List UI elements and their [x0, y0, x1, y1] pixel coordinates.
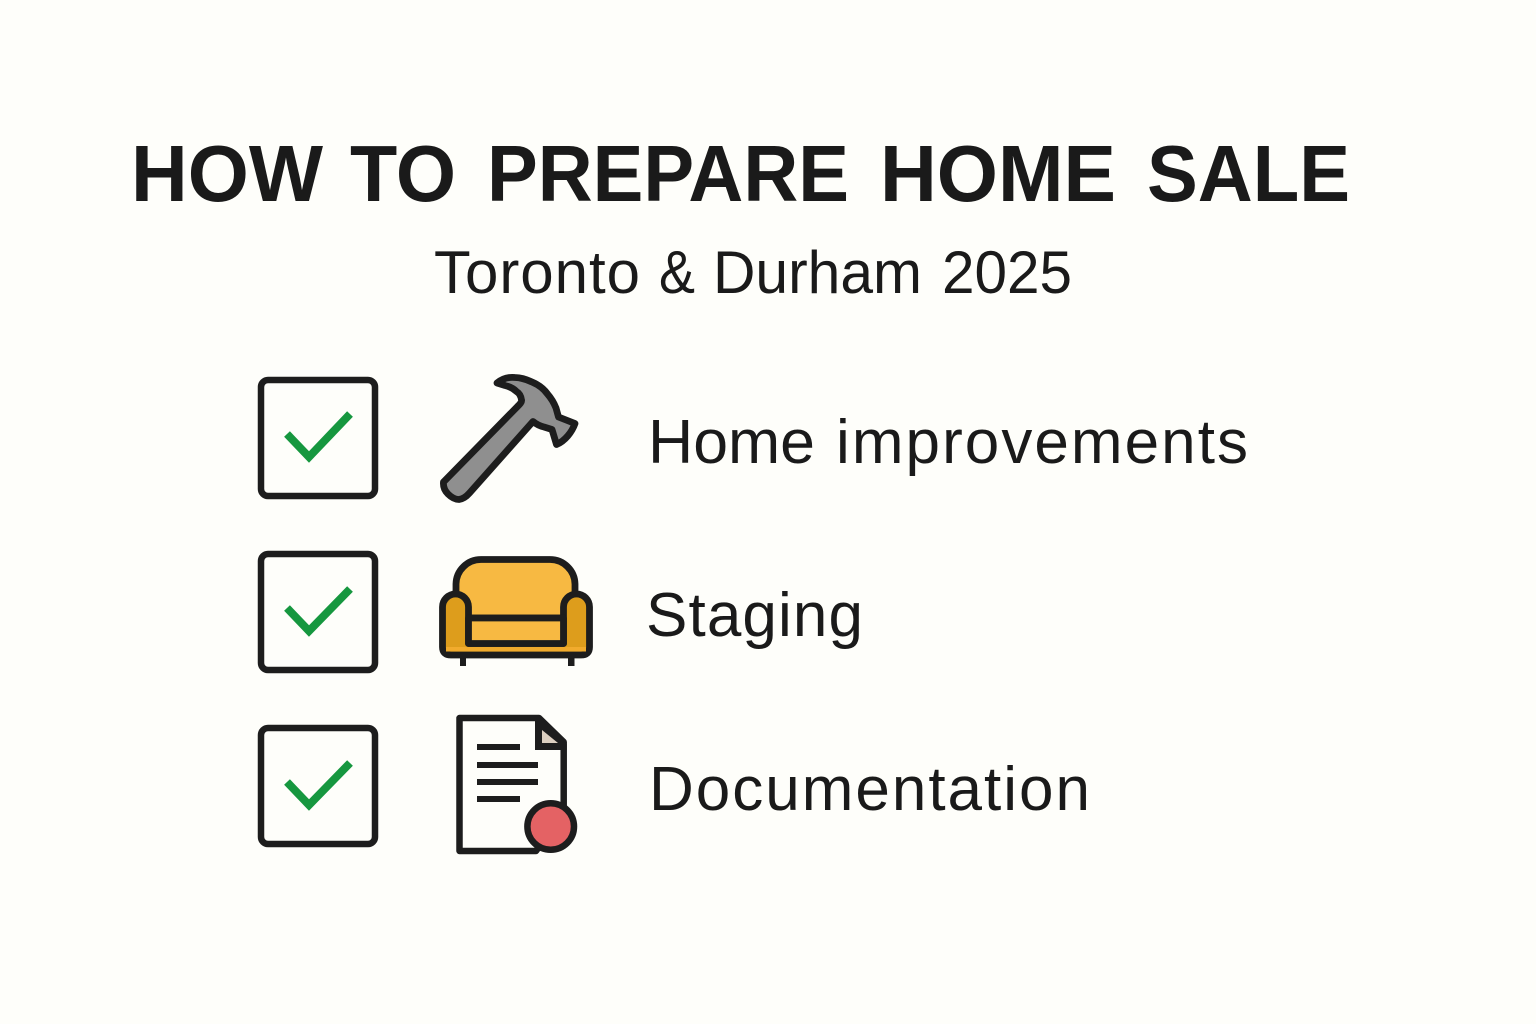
row: home improvements [261, 377, 1248, 500]
label: staging: Staging [646, 581, 863, 650]
icon: hammer [443, 377, 575, 500]
title: HOW [131, 129, 323, 218]
label: home improvements [648, 408, 1248, 477]
title: PREPARE [487, 129, 849, 218]
checkbox 2 [261, 554, 375, 670]
checkbox 1 [261, 380, 375, 496]
title: HOME [880, 129, 1116, 218]
subtitle: 2025 [942, 239, 1072, 306]
title [131, 129, 1350, 218]
title: TO [350, 129, 456, 218]
title: SALE [1147, 129, 1350, 218]
subtitle: Toronto [434, 239, 640, 306]
row: documentation [261, 716, 1090, 851]
subtitle [434, 239, 1072, 306]
subtitle: Durham [713, 239, 922, 306]
row: staging [261, 554, 863, 670]
label: documentation: Documentation [649, 755, 1090, 824]
subtitle: & [659, 239, 695, 306]
icon: sofa [442, 560, 590, 666]
label: home improvements: improvements [836, 408, 1248, 477]
checkbox 3 [261, 728, 375, 844]
icon: document [460, 716, 574, 851]
label: home improvements: Home [648, 408, 815, 477]
